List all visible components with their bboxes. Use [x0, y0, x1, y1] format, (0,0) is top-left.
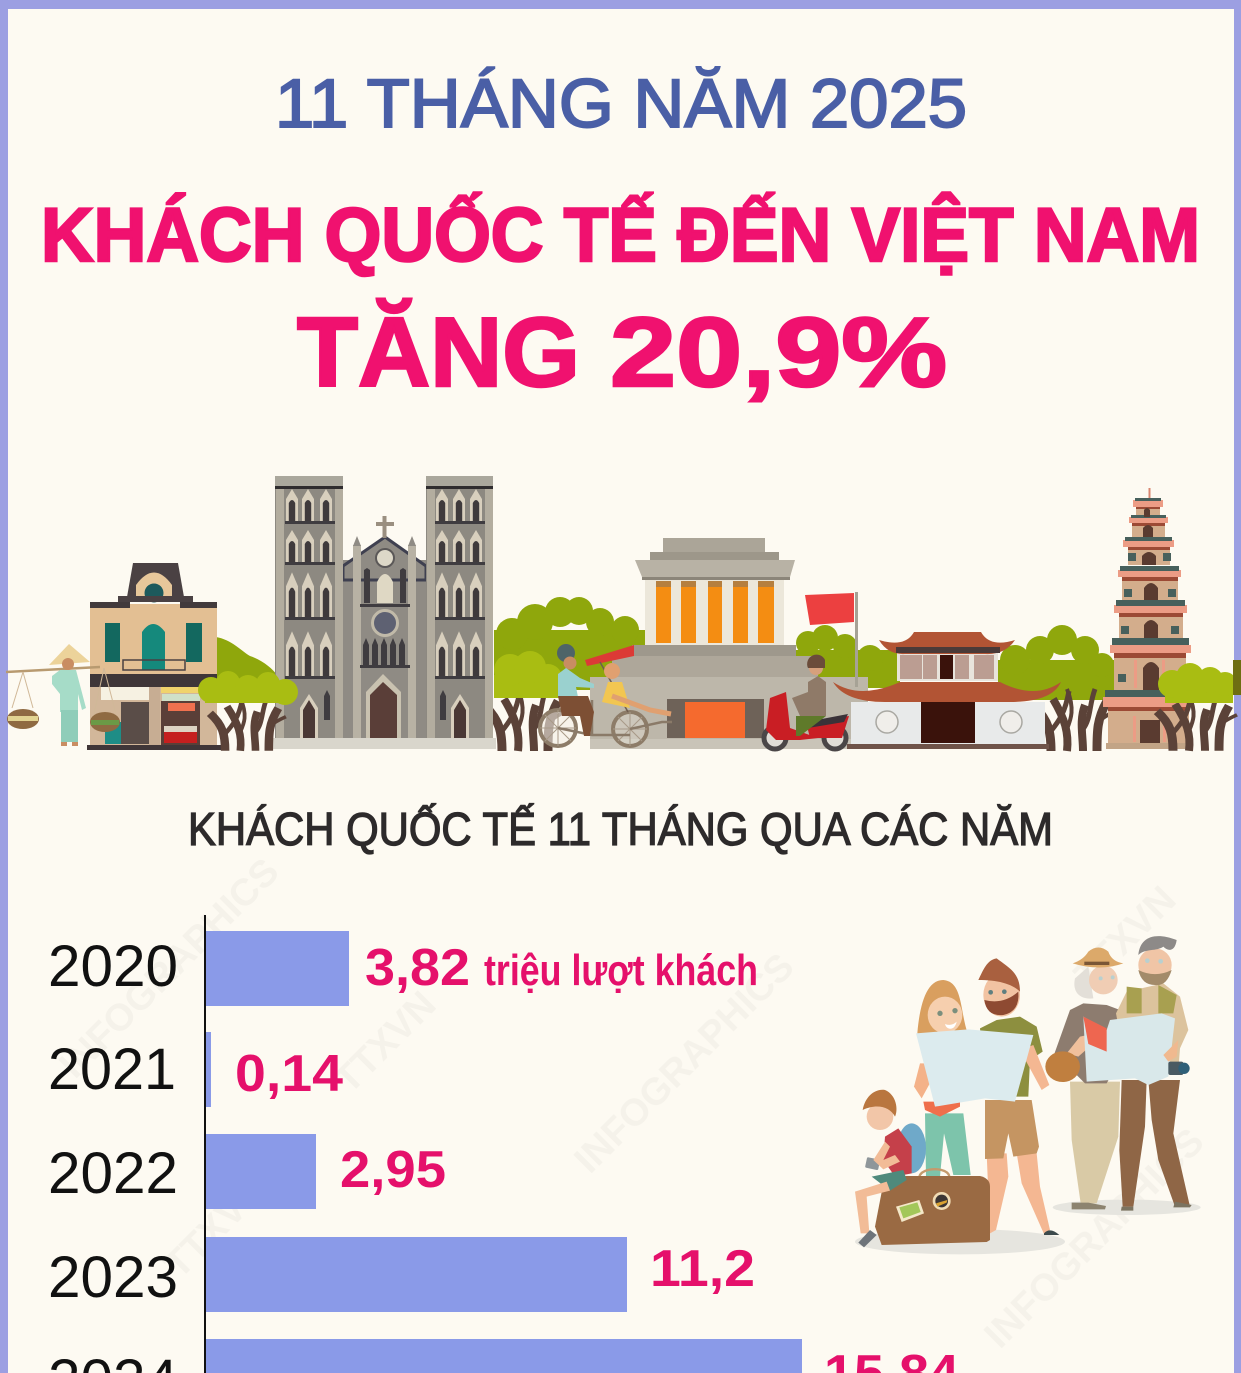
watermarks: TTXVN	[1067, 879, 1184, 996]
watermarks: TTXVN	[327, 984, 444, 1101]
title: period: 11 THÁNG NĂM 2025	[275, 65, 967, 142]
watermarks: INFOGRAPHICS	[977, 1121, 1212, 1356]
illustration: Vietnam landmarks street scene	[6, 476, 1241, 751]
tree in front of pagoda	[1157, 660, 1241, 751]
bar chart axis	[204, 915, 206, 1373]
row 2023	[48, 1237, 755, 1312]
row 2020: triệu lượt khách	[484, 946, 758, 995]
watermarks: INFOGRAPHICS	[52, 851, 287, 1086]
row 2022: 2,95	[340, 1141, 446, 1199]
tree trunks: mausoleum and temple	[486, 689, 1115, 751]
figure: street vendor with carrying pole	[6, 644, 120, 746]
tree beside cathedral	[198, 671, 298, 751]
heading: growth rate	[297, 297, 947, 407]
row 2020: 2020	[48, 934, 178, 999]
row 2022	[48, 1134, 446, 1209]
map held by older couple	[1083, 1013, 1175, 1085]
building: St. Joseph's Cathedral	[271, 476, 496, 749]
section heading: chart title: KHÁCH QUỐC TẾ 11 THÁNG QUA CÁC NĂM	[188, 803, 1053, 855]
building: French colonial house	[87, 563, 221, 750]
luggage suitcase	[875, 1169, 990, 1245]
camera and hand	[1163, 1040, 1190, 1075]
row 2020	[48, 931, 758, 1006]
row 2021: 0,14	[235, 1045, 343, 1103]
figure: boy with backpack	[855, 1090, 926, 1247]
watermarks: TTXVN	[157, 1169, 274, 1286]
red booklet	[1083, 1017, 1107, 1052]
foliage: tree beside mausoleum	[494, 651, 562, 698]
background foliage	[216, 597, 1114, 700]
row 2022: 2022	[48, 1141, 178, 1206]
figure: older man	[1116, 936, 1192, 1211]
row 2021: 2021	[48, 1037, 176, 1102]
row 2023: 11,2	[650, 1240, 755, 1298]
building: Ho Chi Minh Mausoleum	[590, 538, 870, 749]
watermarks: INFOGRAPHICS	[567, 946, 802, 1181]
building: traditional temple	[833, 632, 1061, 749]
row 2020: 3,82	[365, 939, 470, 997]
building: Thien Mu pagoda tower	[1103, 488, 1193, 749]
flag on pole	[805, 592, 858, 687]
row 2024	[48, 1339, 959, 1373]
map held by young couple	[916, 1029, 1033, 1107]
figure: older woman	[1045, 947, 1123, 1209]
bar chart: visitors by year	[48, 915, 959, 1373]
row 2023: 2023	[48, 1245, 178, 1310]
illustration: tourists with maps	[855, 936, 1201, 1254]
heading: growth rate: TĂNG	[297, 297, 580, 407]
figure: cyclo rickshaw with driver and passenger	[540, 644, 672, 746]
figure: motorbike rider	[764, 655, 849, 749]
row 2021	[48, 1032, 343, 1107]
watermarks	[52, 851, 1212, 1356]
figure: young man	[978, 958, 1059, 1235]
heading: international visitors: KHÁCH QUỐC TẾ ĐẾN VIỆT NAM	[41, 192, 1200, 278]
figure: young woman	[914, 980, 971, 1177]
heading: growth rate: 20,9%	[610, 297, 947, 407]
